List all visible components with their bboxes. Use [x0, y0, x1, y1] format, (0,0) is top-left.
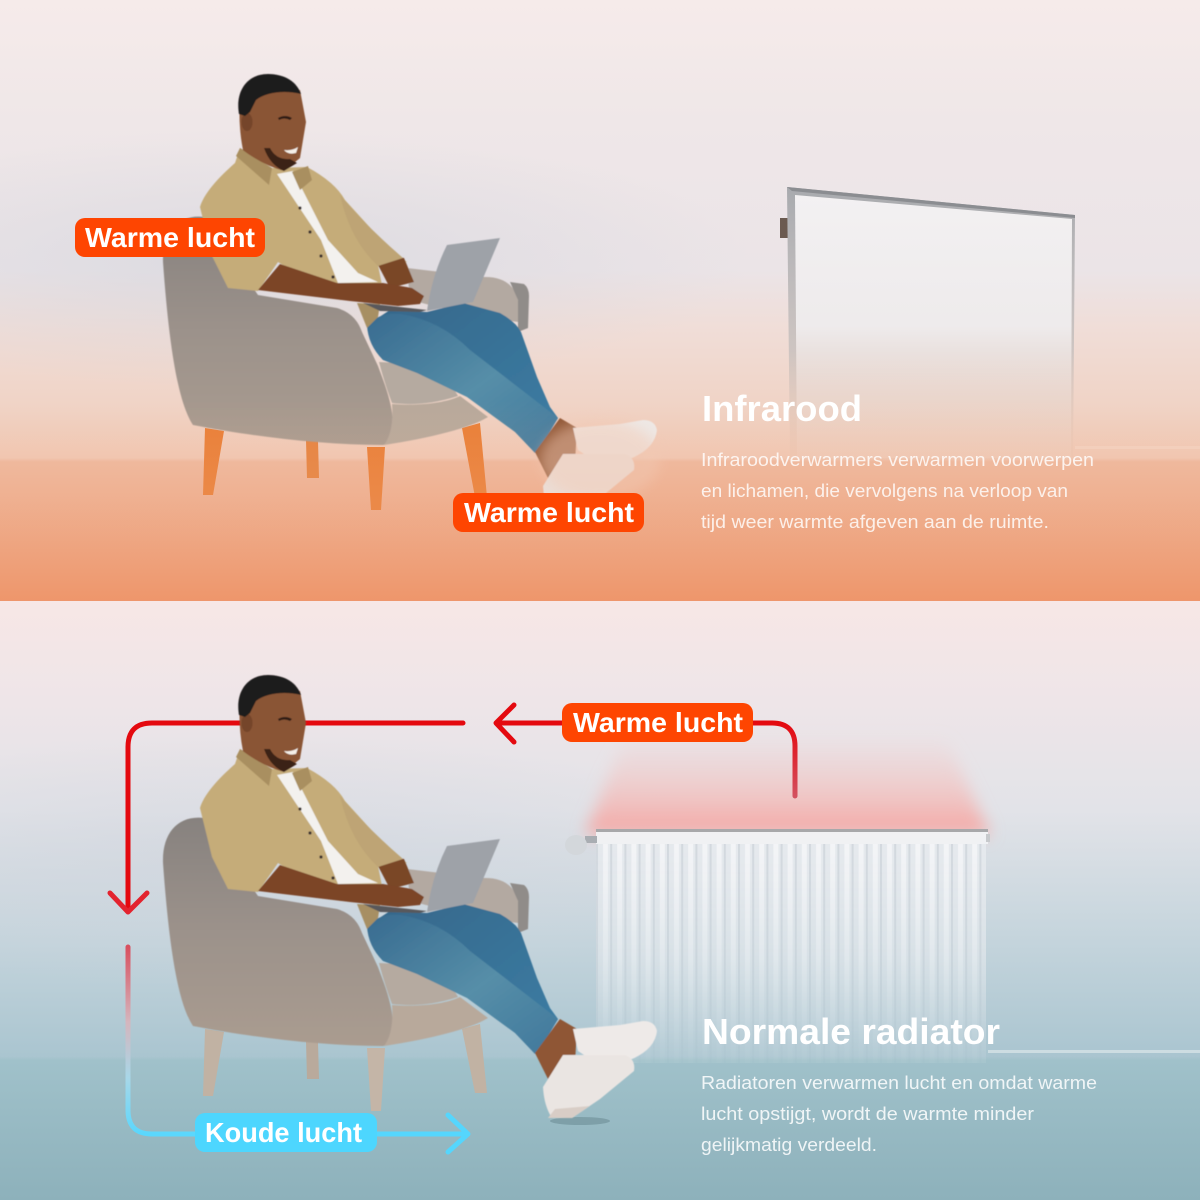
- panel: infrared background: [0, 0, 1200, 601]
- warm overlay over the lower scene: [0, 400, 1200, 601]
- label: cold air: Koude lucht: [205, 1117, 362, 1148]
- arrow: warm air circulation top and left: [110, 723, 463, 912]
- label: warm air: Warme lucht: [573, 707, 743, 738]
- label: warm air: [562, 703, 753, 742]
- arrow: cooling air falling: [128, 947, 200, 1134]
- wall shade: infrared scene: [0, 130, 750, 390]
- text block: radiator description: Radiatoren verwarmen lucht en omdat warme: [701, 1072, 1097, 1093]
- label: warm air left: Warme lucht: [85, 222, 255, 253]
- panel: radiator background: [0, 601, 1200, 1200]
- text block: infrared description: [701, 449, 1094, 532]
- person in armchair: infrared scene: [163, 74, 657, 517]
- label: warm air left: [75, 218, 265, 257]
- text block: radiator description: [701, 1072, 1097, 1155]
- heading: Normale radiator: Normale radiator: [702, 1011, 1000, 1052]
- red heat glow above radiator: [585, 735, 990, 835]
- heading: Infrarood: Infrarood: [702, 388, 862, 429]
- text block: infrared description: Infraroodverwarmers verwarmen voorwerpen: [701, 449, 1094, 470]
- radiator: [565, 829, 1200, 1063]
- warm tint over shoes: [540, 420, 660, 500]
- text block: radiator description: gelijkmatig verdeeld.: [701, 1134, 877, 1155]
- arrow: warm air rising from radiator: [750, 723, 795, 796]
- infrared heater panel: [780, 187, 1200, 460]
- text block: radiator description: lucht opstijgt, wordt de warmte minder: [701, 1103, 1034, 1124]
- arrow: warm air toward person: [496, 705, 565, 742]
- text block: infrared description: tijd weer warmte afgeven aan de ruimte.: [701, 511, 1049, 532]
- text block: infrared description: en lichamen, die vervolgens na verloop van: [701, 480, 1068, 501]
- person in armchair: radiator scene: [163, 675, 657, 1125]
- label: warm air right: [453, 493, 644, 532]
- label: warm air right: Warme lucht: [464, 497, 634, 528]
- arrow: cold air toward radiator: [375, 1115, 468, 1152]
- wall shade: radiator scene: [0, 730, 750, 990]
